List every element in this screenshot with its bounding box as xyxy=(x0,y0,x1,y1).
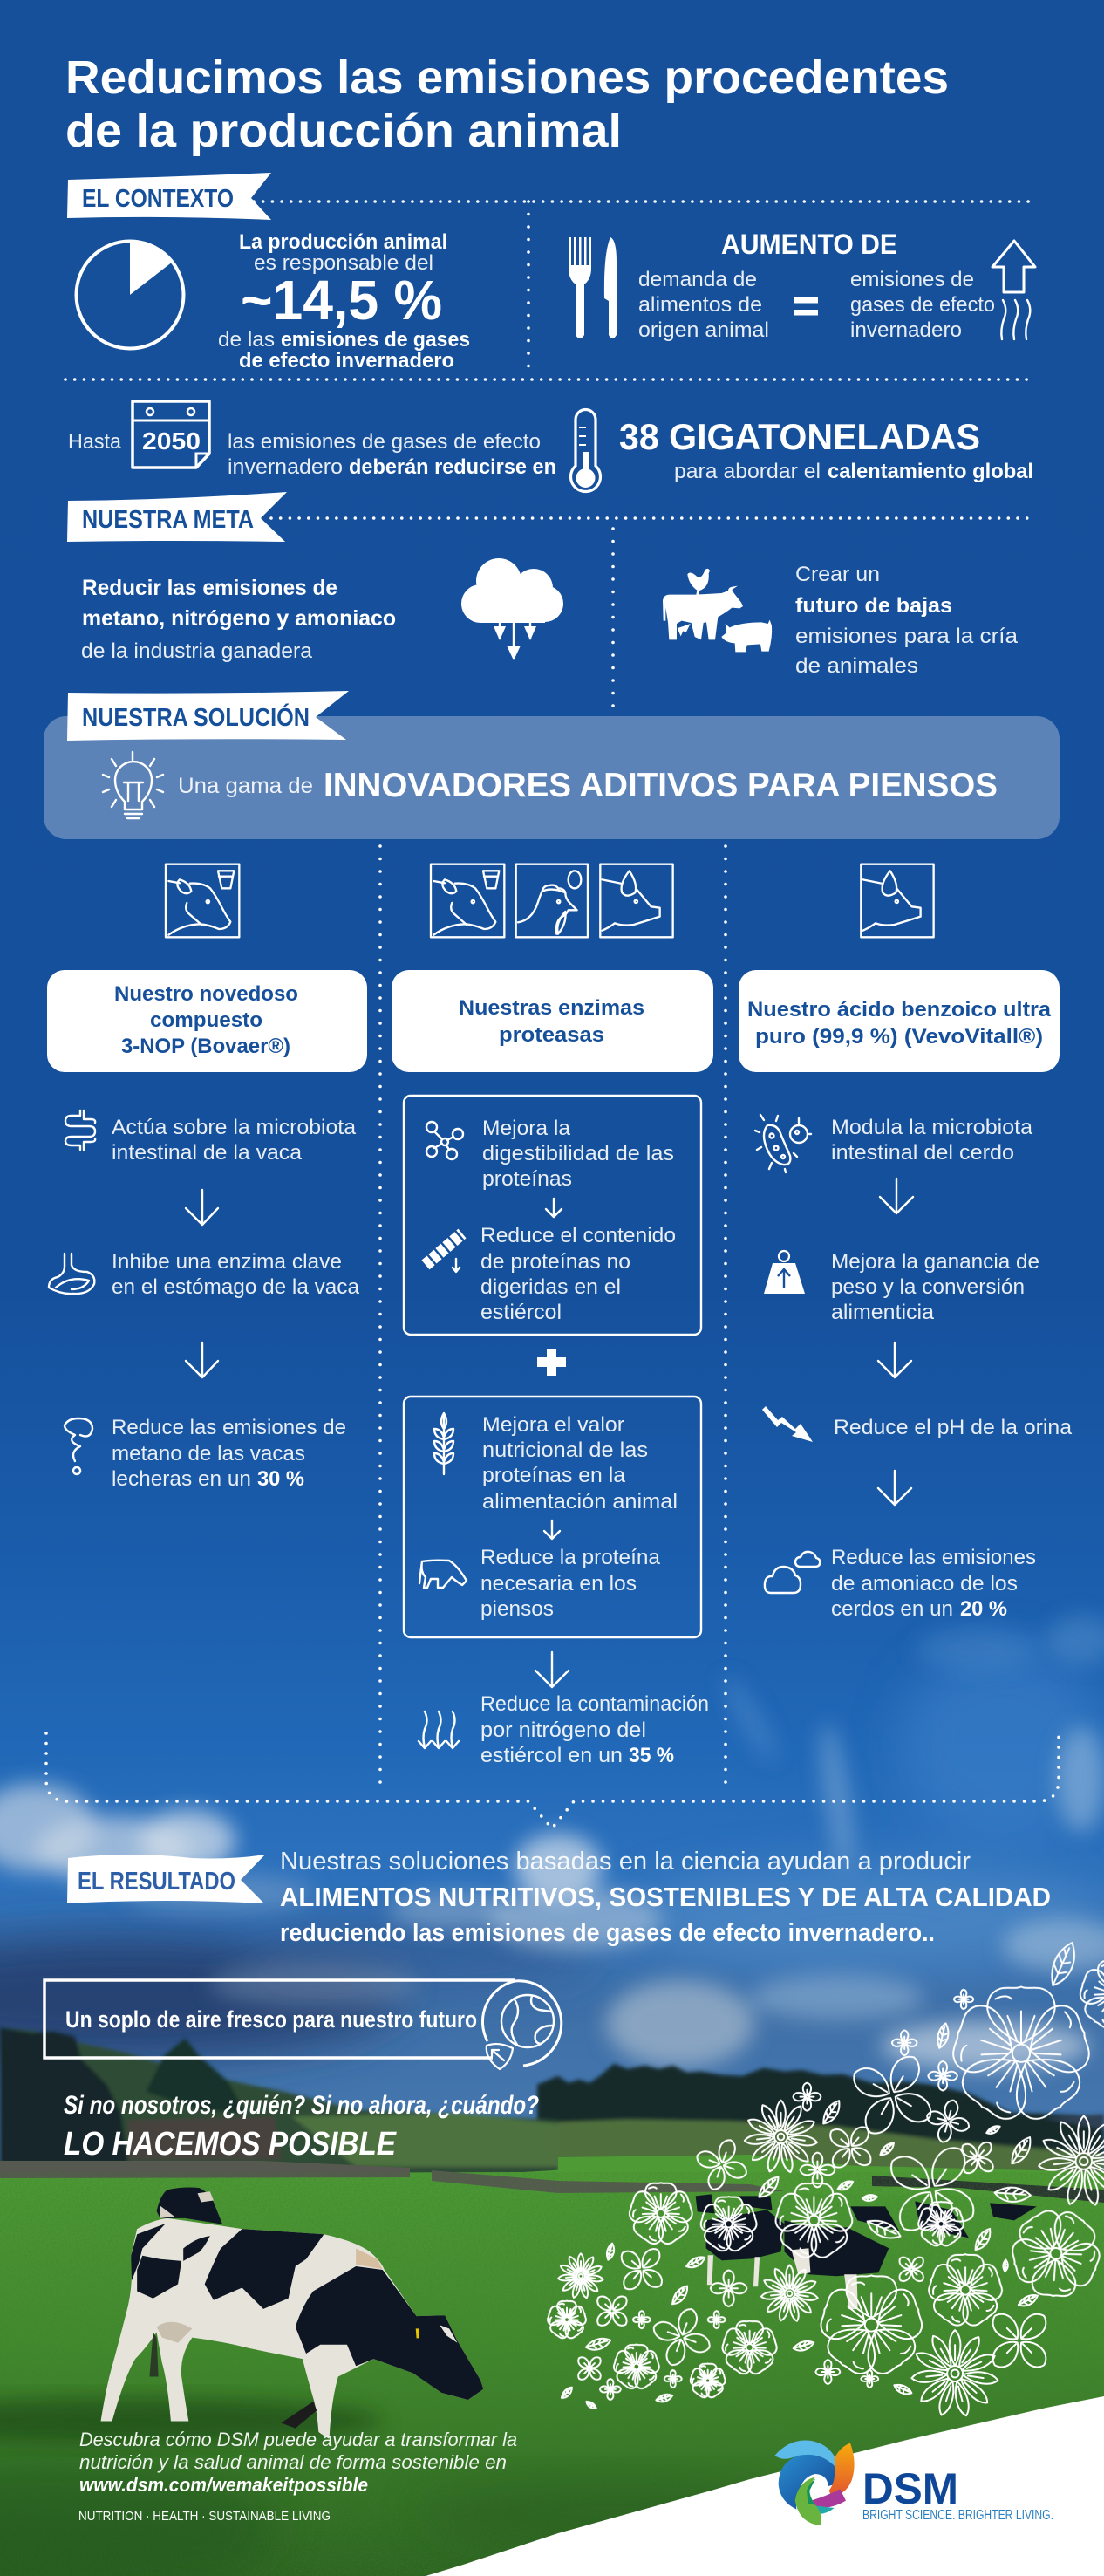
section banner: nuestra meta: NUESTRA META xyxy=(82,506,254,534)
section banner: nuestra solucion xyxy=(67,691,349,741)
text: modula la microbiota: intestinal del cerdo xyxy=(831,1141,1014,1165)
text block: el resultado: ALIMENTOS NUTRITIVOS, SOSTENIBLES Y DE ALTA CALIDAD xyxy=(280,1882,1051,1912)
text: reduce la proteina: necesaria en los xyxy=(480,1572,637,1595)
logo mark xyxy=(774,2441,855,2525)
arrow down xyxy=(878,1343,911,1377)
label: hasta: Hasta xyxy=(68,430,122,454)
text: reduce metano 30 %: lecheras en un xyxy=(112,1467,251,1491)
text: mejora la digestibilidad: digestibilidad de las xyxy=(482,1142,674,1165)
text block: emisiones de gases: gases de efecto xyxy=(850,293,995,317)
text block: futuro de bajas emisiones: Crear un xyxy=(795,563,880,586)
text: reduce el contenido: estiércol xyxy=(480,1301,562,1324)
figure: 38 gigatoneladas: 38 GIGATONELADAS xyxy=(619,416,980,457)
text block: el resultado: Nuestras soluciones basadas en la ciencia ayudan a producir xyxy=(280,1848,971,1876)
text: reduce la proteina: piensos xyxy=(480,1597,554,1621)
card: novedoso compuesto xyxy=(47,970,367,1072)
text block: 14,5 % of emissions: de las xyxy=(218,328,275,352)
text block: futuro de bajas emisiones xyxy=(795,563,1019,678)
text: inhibe una enzima xyxy=(112,1250,360,1299)
icon: grazing cow xyxy=(419,1561,467,1588)
arrow down xyxy=(880,1179,913,1213)
panel: innovadores aditivos band xyxy=(44,716,1060,839)
icon: calendar 2050: 2050 xyxy=(142,427,201,454)
icon: methane gas xyxy=(65,1418,92,1474)
text block: demanda de alimentos: alimentos de xyxy=(638,293,762,317)
text block: el resultado: reduciendo las emisiones de gases de efecto invernadero.. xyxy=(280,1919,935,1947)
card: acido benzoico xyxy=(739,970,1060,1072)
text: reduce el ph: Reduce el pH de la orina xyxy=(834,1416,1073,1439)
icon: pig box, column 3 xyxy=(861,864,934,937)
text: mejora el valor nutricional: Mejora el valor xyxy=(482,1413,624,1437)
icon: two clouds xyxy=(765,1552,820,1593)
figure: 38 gigatoneladas xyxy=(619,416,1033,483)
footer text block xyxy=(78,2429,517,2524)
text block: futuro de bajas emisiones: de animales xyxy=(795,654,918,678)
text: reduce amoniaco 20 %: cerdos en un xyxy=(831,1597,953,1621)
text: reduce contaminacion 35 %: Reduce la contaminación xyxy=(480,1692,709,1716)
footer text block: nutrición y la salud animal de forma sostenible en xyxy=(79,2451,507,2473)
card: acido benzoico: puro (99,9 %) (VevoVitall®) xyxy=(755,1025,1043,1049)
text block: emisiones de gases: emisiones de xyxy=(850,268,974,291)
arrow down xyxy=(535,1652,569,1687)
text block: emisiones de gases xyxy=(850,268,995,342)
icon: stomach xyxy=(49,1254,94,1294)
arrow down xyxy=(878,1471,911,1505)
text: reduce amoniaco 20 %: 20 % xyxy=(960,1597,1007,1621)
figure: 38 gigatoneladas: calentamiento global xyxy=(828,460,1033,483)
text: mejora el valor nutricional: nutricional de las xyxy=(482,1438,648,1462)
white floral illustration xyxy=(546,1942,1104,2417)
foreground cow grazing xyxy=(101,2187,483,2439)
text block: 14,5 % of emissions: La producción animal xyxy=(239,230,447,254)
text: reduce la proteina xyxy=(480,1546,661,1621)
text: reduce el contenido: de proteínas no xyxy=(480,1250,630,1274)
text: mejora la ganancia xyxy=(831,1250,1039,1324)
text block: emisiones de gases: invernadero xyxy=(850,318,962,342)
second cow behind xyxy=(157,2187,222,2224)
icon: up arrow with heat waves xyxy=(992,241,1035,339)
callout: un soplo de aire fresco: Un soplo de aire fresco para nuestro futuro xyxy=(65,2006,477,2033)
text: reduce contaminacion 35 %: estiércol en un xyxy=(480,1744,623,1767)
card: enzimas proteasas: Nuestras enzimas xyxy=(459,996,644,1020)
footer text block: www.dsm.com/wemakeitpossible xyxy=(79,2474,368,2496)
text block: reducir emisiones: de la industria ganadera xyxy=(81,639,313,663)
icon: globe with leaf xyxy=(487,1995,554,2069)
text block: 14,5 % of emissions: es responsable del xyxy=(254,251,433,275)
text: mejora la ganancia: Mejora la ganancia de xyxy=(831,1250,1039,1274)
icon: light bulb xyxy=(103,752,163,818)
section banner: nuestra solucion: NUESTRA SOLUCIÓN xyxy=(82,702,310,732)
icon: falling zigzag arrow xyxy=(762,1406,813,1442)
icon: weight xyxy=(764,1251,805,1294)
wordmark: DSM xyxy=(862,2464,958,2513)
headline: una gama de innovadores aditivos: Una gama de xyxy=(178,774,313,798)
section banner: el resultado: EL RESULTADO xyxy=(78,1868,235,1896)
text: mejora la digestibilidad xyxy=(482,1117,674,1191)
text: mejora la ganancia: peso y la conversión xyxy=(831,1275,1025,1299)
text block: reducir emisiones xyxy=(81,576,396,663)
text block: futuro de bajas emisiones: futuro de bajas xyxy=(795,594,952,618)
text: mejora el valor nutricional xyxy=(482,1413,678,1513)
text: reduce amoniaco 20 %: Reduce las emisiones xyxy=(831,1546,1036,1569)
text: reduce metano 30 %: metano de las vacas xyxy=(112,1442,305,1466)
text: reduce metano 30 %: 30 % xyxy=(257,1467,304,1491)
text: reduce contaminacion 35 %: por nitrógeno del xyxy=(480,1718,646,1742)
icon: fork and knife xyxy=(569,237,617,338)
text block: emisiones deberan reducirse xyxy=(228,430,556,479)
DSM logo xyxy=(774,2441,1053,2525)
text block: emisiones deberan reducirse: deberán reducirse en xyxy=(349,455,556,479)
small arrow down xyxy=(546,1199,562,1217)
icon: cow box, column 1 xyxy=(166,864,239,937)
text: mejora el valor nutricional: proteínas en la xyxy=(482,1464,626,1487)
text: mejora el valor nutricional: alimentación animal xyxy=(482,1490,678,1513)
text: actua sobre la microbiota: intestinal de la vaca xyxy=(112,1141,303,1165)
text block: reducir emisiones: Reducir las emisiones de xyxy=(82,576,337,600)
tagline: BRIGHT SCIENCE. BRIGHTER LIVING. xyxy=(862,2508,1053,2523)
slogan: Si no nosotros, ¿quién? Si no ahora, ¿cuándo? xyxy=(64,2091,539,2120)
section banner: el resultado xyxy=(67,1855,265,1903)
pie chart icon: 14.5 % xyxy=(77,241,183,349)
section banner: el contexto xyxy=(67,173,271,220)
text: actua sobre la microbiota: Actúa sobre la microbiota xyxy=(112,1116,357,1139)
text: reduce metano 30 %: Reduce las emisiones de xyxy=(112,1416,346,1439)
text block: 14,5 % of emissions: de efecto invernadero xyxy=(239,349,454,372)
icon: bacteria xyxy=(755,1115,811,1172)
arrow down xyxy=(186,1190,218,1225)
column 2 steps xyxy=(404,1096,709,1767)
sky clouds xyxy=(0,1616,1104,2070)
text: reduce contaminacion 35 %: 35 % xyxy=(629,1744,674,1767)
card: enzimas proteasas xyxy=(392,970,713,1072)
section banner: nuestra meta xyxy=(67,492,287,542)
text: reduce el contenido: Reduce el contenido xyxy=(480,1224,676,1247)
footer text block: Descubra cómo DSM puede ayudar a transformar la xyxy=(79,2429,517,2450)
figure: 38 gigatoneladas: para abordar el xyxy=(674,460,821,483)
text block: el resultado xyxy=(280,1848,1051,1947)
text: reduce contaminacion 35 % xyxy=(480,1692,709,1767)
text: modula la microbiota: Modula la microbiota xyxy=(831,1116,1033,1139)
icon: calendar 2050 xyxy=(133,401,209,468)
text: modula la microbiota xyxy=(831,1116,1033,1165)
equals sign xyxy=(794,297,818,316)
icon: intestine xyxy=(65,1110,95,1150)
text: inhibe una enzima: Inhibe una enzima clave xyxy=(112,1250,342,1274)
icon: thermometer xyxy=(571,410,600,492)
icon: molecule xyxy=(426,1122,463,1159)
text: actua sobre la microbiota xyxy=(112,1116,357,1165)
text block: 14,5 % of emissions: ~14,5 % xyxy=(241,269,442,331)
icon: cloud with down arrows xyxy=(461,558,563,660)
card: novedoso compuesto: 3-NOP (Bovaer®) xyxy=(121,1035,290,1058)
text block: 14,5 % of emissions xyxy=(218,230,470,372)
column 3 steps xyxy=(755,1115,1073,1621)
callout: un soplo de aire fresco xyxy=(44,1980,562,2069)
distant herd of cows xyxy=(696,2194,1037,2309)
small arrow down xyxy=(544,1520,560,1539)
card: enzimas proteasas: proteasas xyxy=(499,1023,604,1047)
plus sign xyxy=(537,1349,566,1376)
text block: demanda de alimentos: demanda de xyxy=(638,268,757,291)
text: reduce metano 30 % xyxy=(112,1416,346,1491)
text: mejora la ganancia: alimenticia xyxy=(831,1301,935,1324)
icon: wavy down arrows xyxy=(419,1712,459,1748)
icon: chicken cow and pig xyxy=(663,569,772,652)
column 1 steps xyxy=(49,1110,360,1491)
title: Reducimos las emisiones procedentes xyxy=(65,51,949,104)
text block: emisiones deberan reducirse: las emisiones de gases de efecto xyxy=(228,430,541,454)
text: inhibe una enzima: en el estómago de la vaca xyxy=(112,1275,360,1299)
text: mejora la digestibilidad: Mejora la xyxy=(482,1117,571,1140)
text block: demanda de alimentos xyxy=(638,268,769,342)
text: reduce el contenido: digeridas en el xyxy=(480,1275,621,1299)
text: reduce el contenido xyxy=(480,1224,676,1324)
panel: proteinas box 1 xyxy=(404,1096,701,1335)
text: reduce amoniaco 20 % xyxy=(831,1546,1036,1621)
section banner: el contexto: EL CONTEXTO xyxy=(82,185,234,213)
white swoosh corner xyxy=(426,2396,1104,2576)
text block: demanda de alimentos: origen animal xyxy=(638,318,769,342)
icons: cow, hen and pig boxes, column 2 xyxy=(431,864,673,937)
text block: emisiones deberan reducirse: invernadero xyxy=(228,455,343,479)
icon: wheat xyxy=(434,1413,453,1474)
icon: protein coil xyxy=(426,1233,462,1272)
title: de la producción animal xyxy=(65,105,622,157)
arrow down xyxy=(186,1343,218,1377)
card: novedoso compuesto: compuesto xyxy=(150,1008,262,1032)
footer text block: NUTRITION · HEALTH · SUSTAINABLE LIVING xyxy=(78,2510,331,2524)
heading: aumento de: AUMENTO DE xyxy=(721,229,897,260)
slogan xyxy=(64,2091,539,2163)
text: mejora la digestibilidad: proteínas xyxy=(482,1167,572,1191)
text: reduce la proteina: Reduce la proteína xyxy=(480,1546,661,1569)
headline: una gama de innovadores aditivos: INNOVADORES ADITIVOS PARA PIENSOS xyxy=(324,767,998,804)
card: novedoso compuesto: Nuestro novedoso xyxy=(114,982,298,1006)
slogan: LO HACEMOS POSIBLE xyxy=(64,2126,397,2163)
panel: proteinas box 2 xyxy=(404,1397,701,1637)
text block: 14,5 % of emissions: emisiones de gases xyxy=(281,328,470,352)
text block: reducir emisiones: metano, nitrógeno y amoniaco xyxy=(82,606,396,631)
text: reduce amoniaco 20 %: de amoniaco de los xyxy=(831,1572,1018,1595)
photo: hills, treeline and meadow xyxy=(0,2027,1104,2576)
text block: futuro de bajas emisiones: emisiones para la cría xyxy=(795,625,1019,648)
card: acido benzoico: Nuestro ácido benzoico ultra xyxy=(747,998,1052,1022)
title xyxy=(65,51,949,157)
